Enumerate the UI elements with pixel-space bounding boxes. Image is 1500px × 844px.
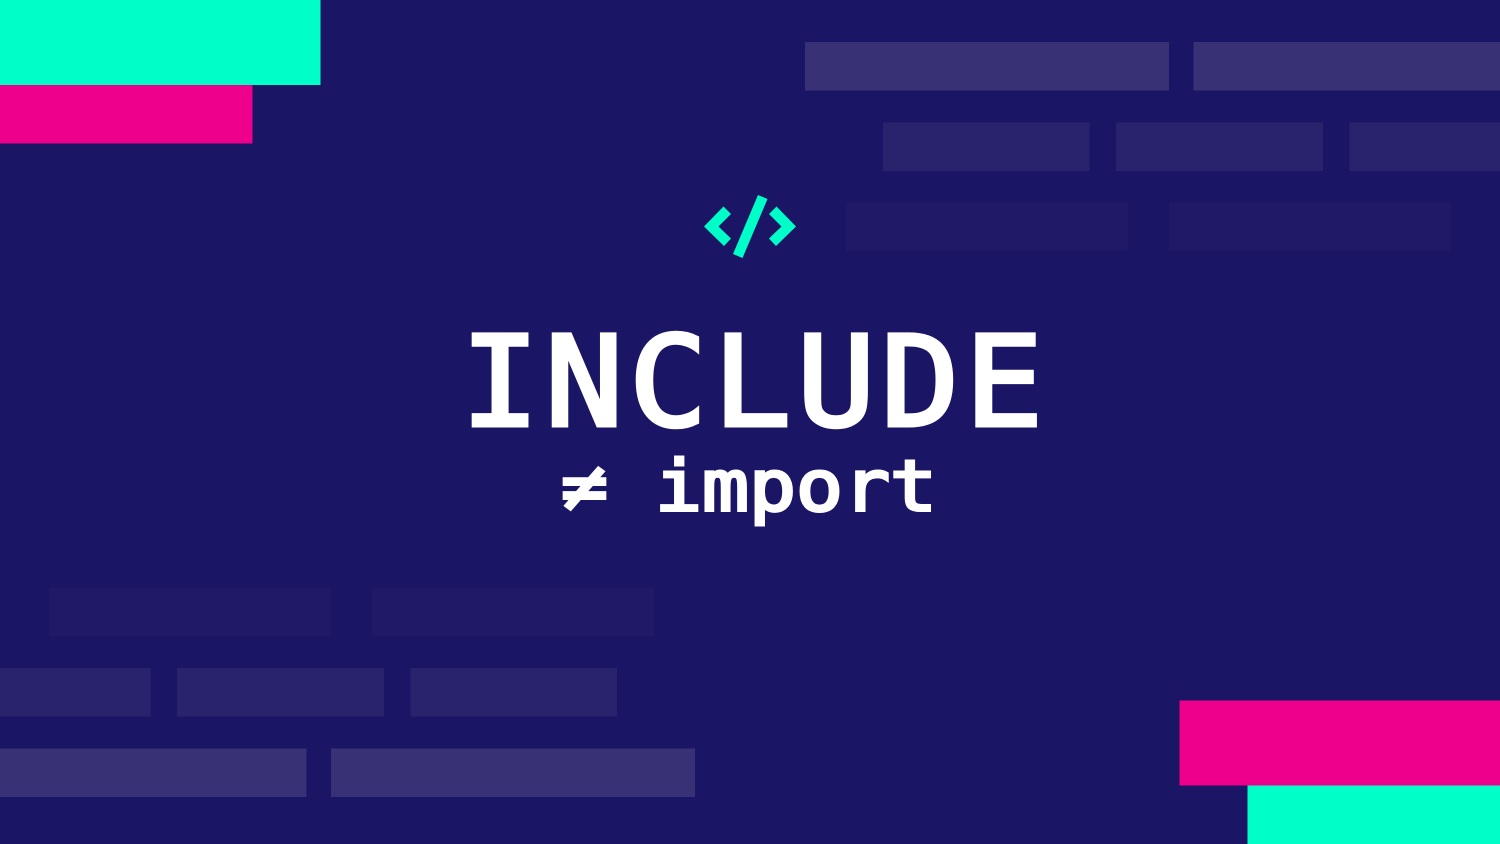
subtitle: ≠ import: [561, 446, 937, 528]
bottom-left faded code bars: [0, 588, 695, 797]
title: INCLUDE: [461, 311, 1049, 456]
top-left corner blocks: [0, 0, 320, 144]
bottom-right corner blocks: [1180, 700, 1500, 844]
top-right faded code bars: [805, 42, 1500, 251]
icon: code brackets: [704, 195, 796, 258]
